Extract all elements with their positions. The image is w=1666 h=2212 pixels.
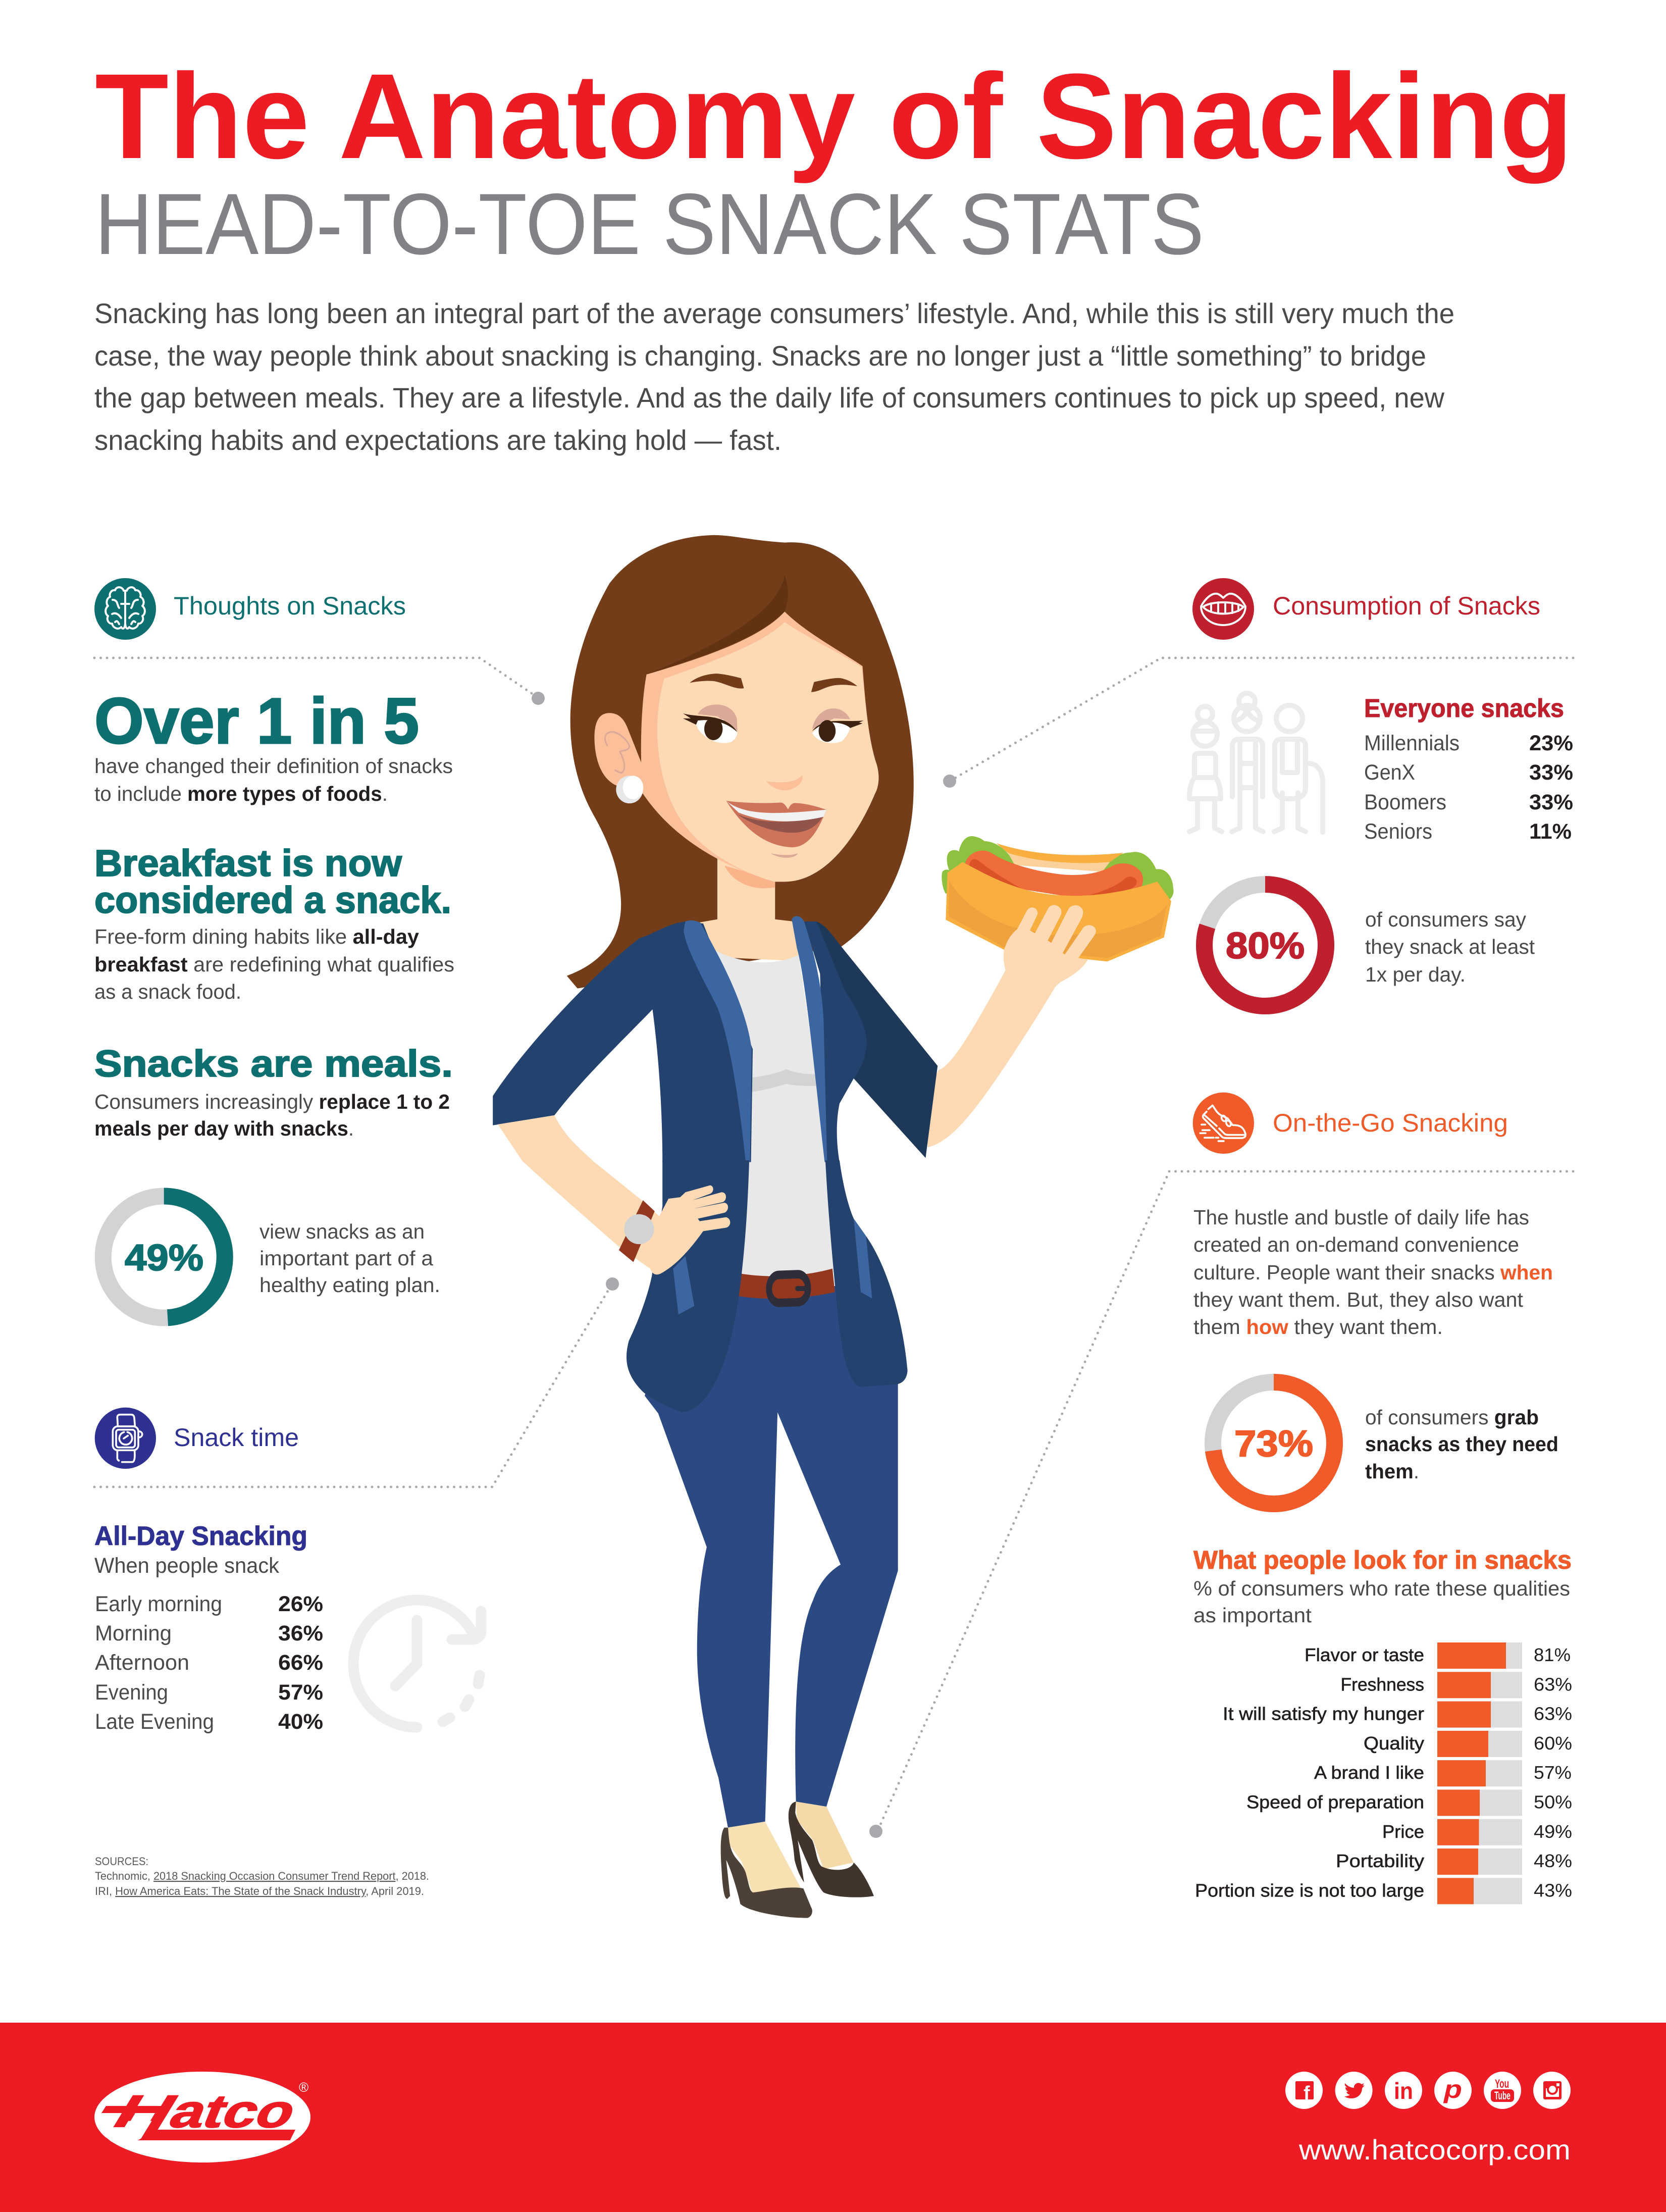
high heel shoes: [721, 1802, 874, 1918]
donut caption: healthy eating plan.: [259, 1273, 440, 1297]
donut caption: [1365, 908, 1535, 986]
stat: breakfast: [94, 842, 454, 1003]
paragraph: The hustle and bustle of daily life has: [1193, 1206, 1529, 1229]
social icon: youtube: Tube: [1494, 2089, 1511, 2102]
stat: breakfast: breakfast are redefining what qualifies: [94, 953, 454, 976]
section heading: Snack time: [174, 1423, 299, 1452]
hair: [567, 535, 914, 989]
sources: Technomic, 2018 Snacking Occasion Consumer Trend Report, 2018.: [95, 1870, 429, 1882]
panel: on-the-go snacking: [1193, 1093, 1572, 1904]
donut caption: of consumers grab: [1365, 1406, 1539, 1429]
bar chart: qualities: 63%: [1534, 1704, 1572, 1724]
table: everyone snacks: Millennials: [1364, 731, 1460, 755]
left arm and hand with watch: [498, 1115, 730, 1274]
intro paragraph: [94, 297, 1454, 456]
donut caption: important part of a: [259, 1247, 433, 1270]
stat: breakfast: Free-form dining habits like all-day: [94, 925, 419, 948]
intro paragraph: Snacking has long been an integral part of the average consumers’ lifestyle. And, while this is still very much the: [94, 297, 1454, 329]
pointer: consumption: [943, 658, 1573, 788]
intro paragraph: snacking habits and expectations are taking hold — fast.: [94, 424, 782, 456]
donut chart: 73%: 73%: [1234, 1423, 1313, 1464]
bar chart: qualities: 57%: [1534, 1762, 1572, 1783]
icon: three generations: [1189, 693, 1323, 832]
belt with buckle: [738, 1269, 835, 1303]
donut caption: view snacks as an: [259, 1220, 425, 1243]
chart heading: What people look for in snacks: [1193, 1546, 1572, 1574]
logo: Hatco: [91, 2072, 310, 2163]
neck and face: [594, 611, 878, 961]
sub heading: When people snack: [94, 1554, 279, 1578]
social icon: instagram: [1533, 2072, 1571, 2109]
bar chart: qualities: A brand I like: [1314, 1762, 1424, 1783]
social icon: linkedin: in: [1394, 2078, 1413, 2104]
bar chart: qualities: 63%: [1534, 1674, 1572, 1694]
social icon: linkedin: [1385, 2072, 1422, 2109]
blazer: [493, 916, 938, 1412]
bar chart: qualities: [1195, 1642, 1572, 1904]
table: everyone snacks: [1364, 694, 1573, 844]
donut caption: them.: [1365, 1460, 1419, 1483]
table: when people snack: Late Evening: [95, 1710, 214, 1734]
paragraph: created an on-demand convenience: [1193, 1233, 1519, 1256]
stat: over 1 in 5: to include more types of foods.: [94, 782, 388, 805]
donut caption: of consumers say: [1365, 908, 1526, 931]
donut chart: 49%: [103, 1196, 225, 1318]
title: The Anatomy of Snacking: [95, 48, 1573, 184]
table: when people snack: Afternoon: [95, 1651, 189, 1675]
website address: www.hatcocorp.com: [1298, 2134, 1571, 2166]
pointer: snack time: [94, 1277, 619, 1487]
stat: over 1 in 5: [94, 685, 453, 805]
chart heading: % of consumers who rate these qualities: [1193, 1577, 1570, 1600]
shirt: [715, 951, 834, 1277]
table: everyone snacks: GenX: [1364, 760, 1415, 785]
chart heading: [1193, 1546, 1572, 1627]
bar chart: qualities: 50%: [1534, 1791, 1572, 1813]
donut caption: they snack at least: [1365, 935, 1535, 958]
section heading: Consumption of Snacks: [1273, 592, 1540, 620]
stat: breakfast: considered a snack.: [94, 879, 451, 921]
icon: clock: [353, 1600, 481, 1727]
table: when people snack: 66%: [278, 1651, 323, 1675]
bar chart: qualities: 49%: [1534, 1821, 1572, 1842]
donut chart: 49%: 49%: [125, 1238, 203, 1278]
sources: SOURCES:: [95, 1855, 148, 1868]
bar chart: qualities: 81%: [1534, 1644, 1571, 1665]
paragraph: [1193, 1206, 1553, 1339]
stat: snacks are meals: Snacks are meals.: [94, 1043, 453, 1085]
table: when people snack: Evening: [95, 1680, 168, 1705]
donut caption: [1365, 1406, 1558, 1483]
donut caption: 1x per day.: [1365, 963, 1466, 986]
panel: consumption of snacks: [1189, 578, 1573, 1006]
illustration: woman holding hot dog: [493, 535, 1174, 1918]
table: everyone snacks: 33%: [1529, 760, 1573, 785]
table: when people snack: 57%: [278, 1680, 323, 1705]
table: everyone snacks: 11%: [1529, 819, 1572, 844]
icon: running shoe: [1193, 1093, 1254, 1154]
social icon: youtube: [1484, 2072, 1521, 2109]
sub heading: [94, 1521, 307, 1578]
logo: Hatco: atco: [163, 2085, 304, 2137]
stat: over 1 in 5: Over 1 in 5: [94, 685, 419, 757]
donut caption: [259, 1220, 440, 1297]
table: when people snack: Early morning: [95, 1592, 222, 1616]
bar chart: qualities: Quality: [1364, 1733, 1424, 1754]
subtitle: HEAD-TO-TOE SNACK STATS: [95, 176, 1204, 273]
sources: [95, 1855, 429, 1897]
sources: IRI, How America Eats: The State of the Snack Industry, April 2019.: [95, 1885, 424, 1897]
bar chart: qualities: Freshness: [1341, 1674, 1424, 1694]
logo: Hatco: ®: [299, 2080, 308, 2095]
social icon: facebook: f: [1304, 2083, 1310, 2104]
table: when people snack: 36%: [278, 1621, 323, 1645]
icon: mouth: [1192, 578, 1254, 640]
pointer: thoughts: [94, 658, 545, 705]
table: everyone snacks: 23%: [1529, 731, 1573, 755]
stat: breakfast: Breakfast is now: [94, 842, 402, 884]
bar chart: qualities: It will satisfy my hunger: [1223, 1704, 1424, 1724]
stat: breakfast: as a snack food.: [94, 980, 241, 1003]
paragraph: they want them. But, they also want: [1193, 1288, 1524, 1311]
table: when people snack: [95, 1592, 323, 1734]
hot dog and raised hand: [924, 836, 1174, 1147]
intro paragraph: the gap between meals. They are a lifestyle. And as the daily life of consumers continues to pick up speed, new: [94, 382, 1445, 414]
table: when people snack: Morning: [95, 1621, 172, 1645]
trousers: [645, 1286, 898, 1828]
panel: snack time: [94, 1408, 481, 1897]
bar chart: qualities: Speed of preparation: [1246, 1791, 1424, 1813]
bar chart: qualities: 48%: [1534, 1850, 1572, 1871]
table: when people snack: 26%: [278, 1592, 323, 1616]
stat: over 1 in 5: have changed their definition of snacks: [94, 754, 453, 778]
paragraph: them how they want them.: [1193, 1315, 1443, 1339]
stat: snacks are meals: meals per day with snacks.: [94, 1117, 354, 1140]
bar chart: qualities: Portability: [1336, 1850, 1424, 1871]
bar chart: qualities: 60%: [1534, 1733, 1572, 1754]
panel: thoughts on snacks: [94, 578, 454, 1318]
table: when people snack: 40%: [278, 1710, 323, 1734]
bar chart: qualities: Portion size is not too large: [1195, 1880, 1424, 1900]
table: everyone snacks: Everyone snacks: [1364, 694, 1564, 723]
stat: snacks are meals: [94, 1043, 453, 1140]
table: everyone snacks: Boomers: [1364, 790, 1446, 814]
logo: Hatco: H: [91, 2081, 192, 2154]
section heading: On-the-Go Snacking: [1273, 1109, 1508, 1137]
intro paragraph: case, the way people think about snacking is changing. Snacks are no longer just a “little something” to bridge: [94, 340, 1426, 372]
section heading: Thoughts on Snacks: [174, 592, 406, 620]
donut chart: 80%: [1205, 885, 1326, 1006]
stat: snacks are meals: Consumers increasingly replace 1 to 2: [94, 1090, 450, 1113]
bar chart: qualities: 43%: [1534, 1880, 1572, 1900]
donut chart: 80%: 80%: [1226, 925, 1305, 966]
table: everyone snacks: 33%: [1529, 790, 1573, 814]
social icon: twitter: [1335, 2072, 1373, 2109]
bar chart: qualities: Flavor or taste: [1305, 1644, 1424, 1665]
paragraph: culture. People want their snacks when: [1193, 1261, 1553, 1284]
table: everyone snacks: Seniors: [1364, 819, 1432, 844]
bar chart: qualities: Price: [1382, 1821, 1424, 1842]
icon: smart watch: [95, 1408, 156, 1469]
donut chart: 73%: [1213, 1382, 1335, 1504]
footer band: [0, 2023, 1666, 2212]
chart heading: as important: [1193, 1604, 1312, 1627]
social icon: pinterest: [1434, 2072, 1472, 2109]
donut caption: snacks as they need: [1365, 1432, 1558, 1456]
social icon: pinterest: p: [1443, 2075, 1462, 2103]
social icon: youtube: You: [1495, 2077, 1509, 2091]
face details: [616, 575, 864, 858]
pointer: on the go: [869, 1171, 1573, 1838]
icon: brain: [94, 578, 156, 640]
social icon: facebook: [1285, 2072, 1323, 2109]
sub heading: All-Day Snacking: [94, 1521, 307, 1551]
